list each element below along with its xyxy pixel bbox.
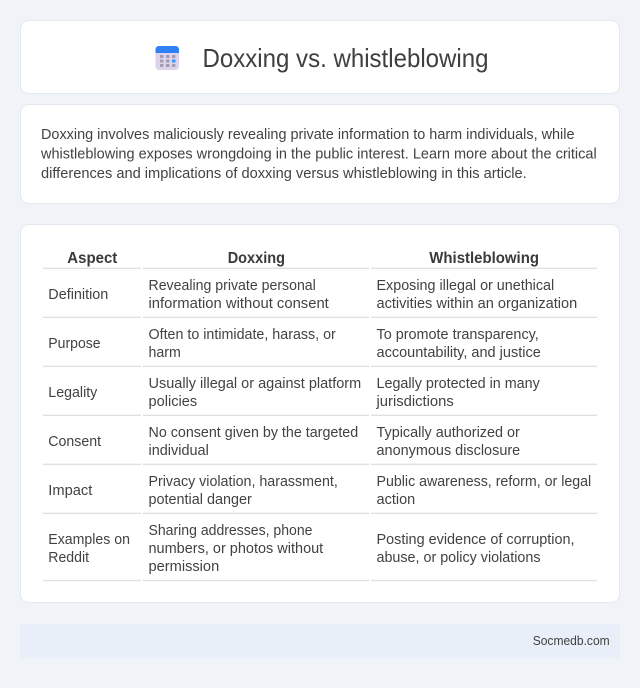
row: impact: Privacy violation, harassment, — [148, 474, 338, 490]
row: legality: policies — [148, 394, 197, 410]
intro text: Doxxing involves maliciously revealing private information to harm individuals, while — [41, 127, 574, 143]
intro text — [40, 127, 597, 182]
row: impact — [48, 474, 591, 508]
row: definition: Definition — [48, 287, 108, 303]
row: examples on Reddit: Examples on — [48, 532, 130, 548]
intro text: whistleblowing exposes wrongdoing in the public interest. Learn more about the critical — [40, 146, 597, 162]
row: purpose — [48, 327, 541, 361]
row: definition: information without consent — [148, 296, 329, 312]
row: examples on Reddit: Sharing addresses, phone — [148, 523, 312, 539]
row: impact: action — [376, 492, 415, 508]
row: legality: Legally protected in many — [376, 376, 540, 392]
panel: introduction — [20, 104, 620, 204]
row: legality: Usually illegal or against platform — [148, 376, 361, 392]
row: legality — [48, 376, 540, 410]
row: impact: potential danger — [148, 492, 252, 508]
row: legality: Legality — [48, 385, 98, 401]
row: consent: No consent given by the targeted — [148, 425, 358, 441]
row: consent: anonymous disclosure — [376, 443, 520, 459]
row: examples on Reddit: permission — [148, 559, 219, 575]
table header row: Aspect — [67, 250, 118, 267]
row: examples on Reddit: Reddit — [48, 550, 89, 566]
row: purpose: Often to intimidate, harass, or — [148, 327, 336, 343]
row: examples on Reddit: Posting evidence of corruption, — [376, 532, 574, 548]
row: purpose: harm — [148, 345, 181, 361]
row: consent: Consent — [48, 434, 101, 450]
footer credit: Socmedb.com — [533, 634, 610, 648]
title: Doxxing vs. whistleblowing — [202, 43, 488, 73]
row: definition — [48, 278, 577, 312]
row: purpose: To promote transparency, — [376, 327, 539, 343]
intro text: differences and implications of doxxing versus whistleblowing in this article. — [41, 166, 527, 182]
row: impact: Impact — [48, 483, 92, 499]
row: consent: individual — [148, 443, 209, 459]
row: consent: Typically authorized or — [376, 425, 520, 441]
table header row: Whistleblowing — [429, 250, 539, 267]
row: examples on Reddit: abuse, or policy violations — [376, 550, 540, 566]
table header row — [67, 250, 539, 267]
row: legality: jurisdictions — [375, 394, 454, 410]
row: impact: Public awareness, reform, or legal — [376, 474, 591, 490]
panel: comparison table — [20, 224, 620, 602]
table header row: Doxxing — [228, 250, 285, 267]
icon: calendar — [156, 46, 179, 70]
row: definition: Revealing private personal — [148, 278, 316, 294]
panel: header — [20, 20, 620, 94]
row: definition: activities within an organization — [376, 296, 577, 312]
row: purpose: Purpose — [48, 336, 101, 352]
row: consent — [48, 425, 520, 459]
row: examples on Reddit — [48, 523, 575, 575]
footer — [20, 624, 620, 658]
row: definition: Exposing illegal or unethical — [376, 278, 554, 294]
row: examples on Reddit: numbers, or photos without — [148, 541, 323, 557]
row: purpose: accountability, and justice — [376, 345, 541, 361]
